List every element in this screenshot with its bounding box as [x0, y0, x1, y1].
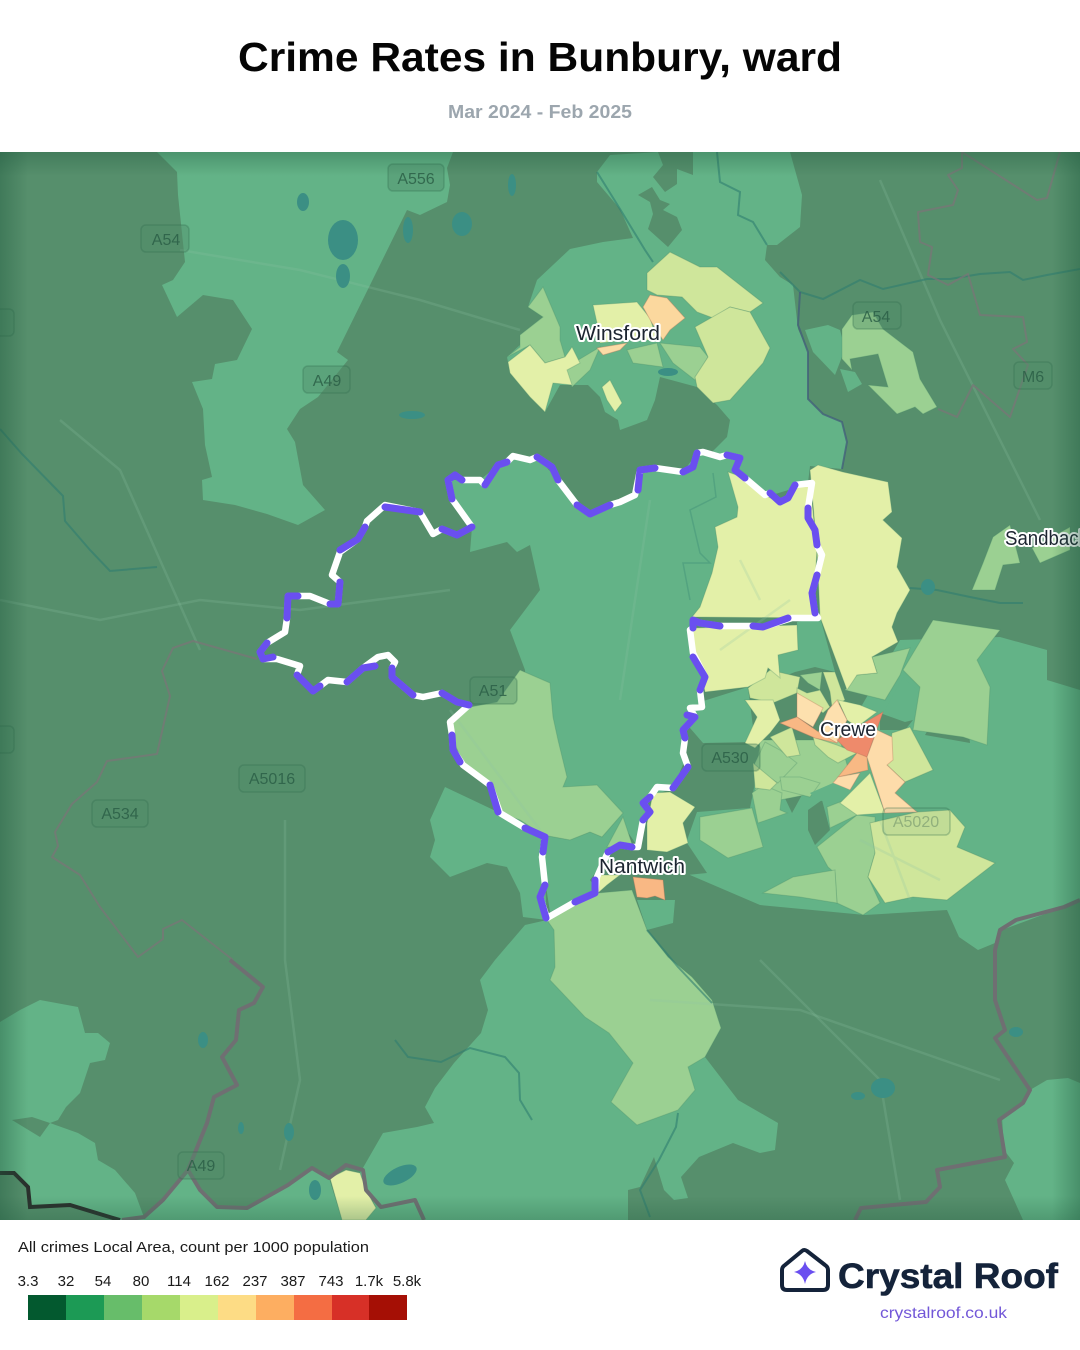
road label A54 — [141, 225, 189, 252]
administrative boundaries — [52, 152, 1060, 960]
yellow-green local areas — [647, 252, 995, 903]
road label A5020 — [883, 808, 950, 835]
road label A49 — [303, 366, 350, 393]
road label A556: A556 — [397, 171, 435, 188]
legend tick labels: 1.7k — [355, 1273, 384, 1290]
rivers and lakes — [0, 152, 1080, 1217]
road label clipped left lower — [0, 726, 14, 753]
road label M6: M6 — [1022, 369, 1044, 386]
light-green local areas — [450, 287, 1070, 1125]
Bunbury ward boundary — [260, 452, 822, 918]
logo wordmark: Crystal Roof — [838, 1257, 1058, 1296]
legend — [18, 1239, 422, 1320]
road label A5020: A5020 — [893, 814, 939, 831]
road label A530: A530 — [711, 750, 749, 767]
title: Crime Rates in Bunbury, ward — [238, 34, 842, 80]
Crystal Roof logo — [782, 1250, 1058, 1322]
legend title: All crimes Local Area, count per 1000 population — [18, 1239, 369, 1256]
green area south of Crewe centre — [810, 783, 850, 803]
purple dashes — [260, 453, 817, 918]
legend tick labels: 3.3 — [18, 1273, 38, 1290]
road label A51 — [470, 677, 517, 704]
road label A530 — [702, 744, 760, 771]
road label A5016: A5016 — [249, 771, 295, 788]
road label A5016 — [239, 765, 305, 792]
road label A51: A51 — [479, 683, 507, 700]
place label Crewe: Crewe — [820, 719, 876, 741]
legend tick labels: 114 — [167, 1273, 191, 1290]
legend colour scale — [28, 1295, 407, 1320]
legend tick labels: 387 — [280, 1273, 306, 1290]
pale-yellow local areas — [330, 302, 910, 1220]
orange and red high-crime areas — [597, 295, 917, 900]
road label A54: A54 — [152, 232, 180, 249]
black boundary bottom-left — [0, 1173, 120, 1220]
legend tick labels: 32 — [58, 1273, 74, 1290]
choropleth map — [0, 152, 1080, 1220]
mid-green local areas — [0, 152, 1080, 1220]
road label A49 south: A49 — [187, 1158, 215, 1175]
road label A534 — [92, 800, 148, 827]
road label A534: A534 — [101, 806, 139, 823]
road label A556 — [388, 164, 444, 191]
legend tick labels: 237 — [242, 1273, 268, 1290]
dark gaps between local areas — [638, 152, 970, 875]
legend tick labels: 743 — [318, 1273, 344, 1290]
road label M6 — [1014, 362, 1052, 389]
place labels — [576, 323, 1080, 878]
legend tick labels: 162 — [204, 1273, 230, 1290]
road label clipped left — [0, 309, 14, 336]
website url: crystalroof.co.uk — [880, 1305, 1008, 1322]
place label Winsford: Winsford — [576, 323, 660, 345]
legend tick labels: 54 — [95, 1273, 111, 1290]
legend tick labels: 5.8k — [393, 1273, 422, 1290]
faint roads — [0, 180, 1040, 1200]
white ward outline — [260, 452, 822, 918]
legend tick labels: 80 — [133, 1273, 149, 1290]
legend tick labels — [18, 1273, 422, 1290]
map background — [0, 152, 1080, 1220]
subtitle: date range: Mar 2024 - Feb 2025 — [448, 102, 632, 122]
road label A49: A49 — [313, 373, 341, 390]
road label A49 south — [178, 1152, 224, 1179]
road labels — [0, 164, 1052, 1179]
road label A54 east — [853, 302, 901, 329]
road label A54 east: A54 — [862, 309, 890, 326]
logo icon: house with star — [782, 1250, 828, 1290]
place label Nantwich: Nantwich — [599, 856, 685, 878]
map vignette — [0, 152, 1080, 1220]
